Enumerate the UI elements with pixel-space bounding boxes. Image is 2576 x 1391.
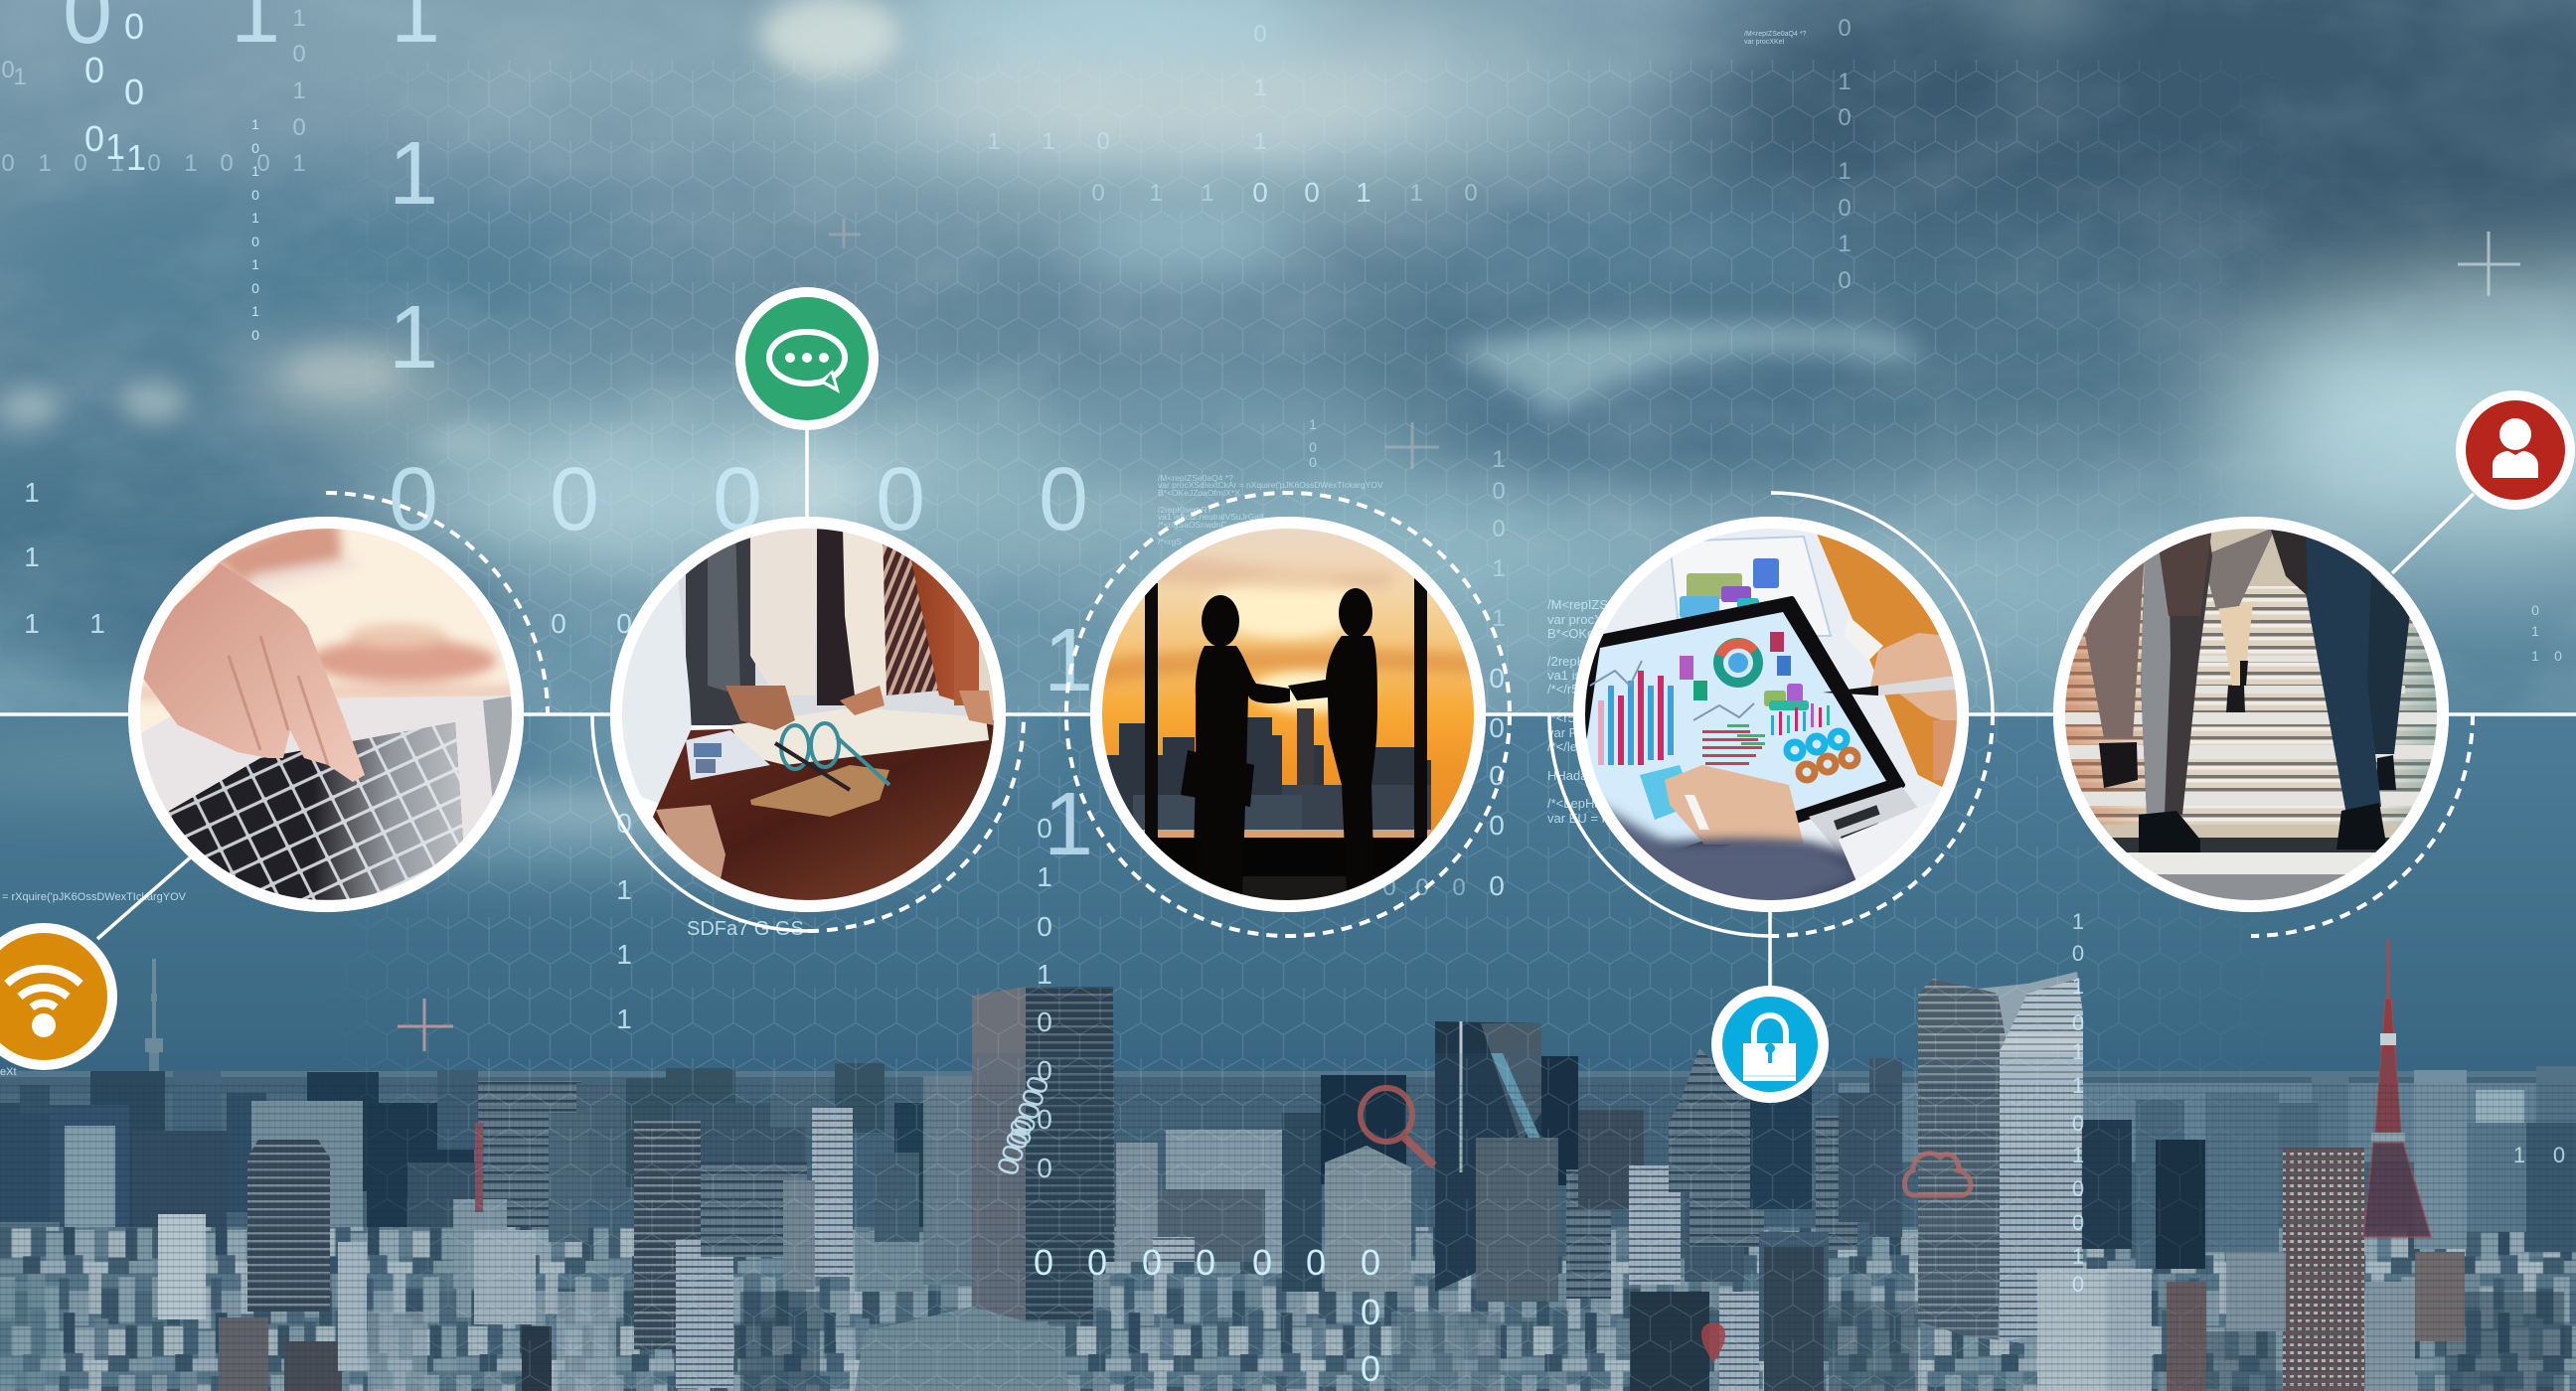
binary digits: medium: 0 xyxy=(124,72,144,112)
far-left leg xyxy=(2085,551,2145,788)
orbit arcs xyxy=(326,493,2473,936)
label: SDFa7 G GS: SDFa7 G GS xyxy=(687,918,804,940)
binary digits: medium: 0 xyxy=(1361,1242,1380,1283)
binary digits: faint columns and rows: 1 xyxy=(1201,180,1214,207)
binary digits: row and columns: 1 xyxy=(24,477,40,508)
binary digits: faint columns and rows: 0 xyxy=(1,150,15,177)
icon: padlock on blue circle xyxy=(1711,986,1829,1103)
binary digits: small: 1 xyxy=(251,116,259,132)
suit and shirts xyxy=(686,527,755,725)
glasses xyxy=(781,723,889,785)
binary digits: large: 1 xyxy=(389,288,438,387)
code snippet: behind middle-right photo xyxy=(1547,597,1624,826)
city cool tint xyxy=(0,1053,2576,1391)
sky clouds below horizon xyxy=(0,696,1034,860)
code snippet: behind middle-right photo: /*<LepHa xyxy=(1547,796,1602,811)
line chart xyxy=(1590,661,1754,720)
solid arc around photo 4, top right xyxy=(1771,493,1993,714)
binary digits: small xyxy=(251,116,2562,664)
low-rise tonal blocks xyxy=(0,1282,2564,1391)
photo 5: business people climbing stairs xyxy=(2053,517,2449,912)
binary digits: tower column: 0 xyxy=(2072,1010,2084,1035)
solid arc around photo 2 xyxy=(592,714,808,931)
code snippet: behind middle-right photo: HHadaX xyxy=(1547,768,1596,783)
binary digits: row and columns: 1 xyxy=(616,1004,632,1034)
binary digits: row and columns: 1 xyxy=(89,608,105,639)
centre-left towers xyxy=(158,1108,924,1388)
lower hand xyxy=(1665,765,1804,845)
donuts row xyxy=(1787,731,1857,780)
binary digits: faint columns and rows: 1 xyxy=(110,150,124,177)
binary digits: faint columns and rows: 0 xyxy=(1838,267,1852,294)
binary digits: row and columns: 0 xyxy=(1037,1104,1052,1135)
binary digits: faint columns and rows: 0 xyxy=(1415,874,1429,901)
binary digits: small: 1 xyxy=(251,163,259,179)
binary digits: faint columns and rows xyxy=(1,5,1852,901)
binary digits: row and columns: 0 xyxy=(1252,177,1268,208)
binary digits: faint columns and rows: 1 xyxy=(13,64,27,90)
binary digits: row and columns: 1 xyxy=(1037,861,1052,892)
arc around photo 1 xyxy=(326,493,548,714)
binary digits: faint columns and rows: 1 xyxy=(1492,555,1506,582)
binary digits: faint columns and rows: 0 xyxy=(292,114,306,141)
icon: chat bubble on green circle xyxy=(735,287,879,430)
binary digits: faint columns and rows: 0 xyxy=(1838,195,1852,222)
binary digits: small: 0 xyxy=(1309,439,1317,455)
binary digits: tower column: 0 xyxy=(2553,1143,2565,1167)
binary digits: faint columns and rows: 0 xyxy=(1838,15,1852,42)
centre-right towers xyxy=(1093,1021,1902,1391)
binary digits: faint columns and rows: 0 xyxy=(1452,874,1466,901)
code snippet: above centre photo: /2repKlsert RT xyxy=(1158,505,1212,515)
dashed arc around photo 5 xyxy=(2251,714,2473,936)
binary digits: medium: 0 xyxy=(84,50,104,90)
binary digits: faint columns and rows: 1 xyxy=(1149,180,1163,207)
binary digits: small: 1 xyxy=(251,303,259,319)
right hand and pen xyxy=(1868,633,1963,725)
code snippet: behind middle-right photo: /*</le xyxy=(1547,739,1577,754)
binary digits: medium: 0 xyxy=(1252,1242,1272,1283)
binary digits: faint columns and rows: 0 xyxy=(1091,180,1105,207)
binary digits: medium: 0 xyxy=(1361,1292,1380,1332)
binary digits: faint columns and rows: 1 xyxy=(987,128,1001,155)
binary digits: row and columns: 1 xyxy=(616,874,632,905)
Tokyo Tower xyxy=(2363,939,2431,1237)
slanted binary digits on tower: 00000 xyxy=(1003,1073,1056,1150)
binary digits: small: 1 xyxy=(2531,623,2539,639)
binary digits: faint columns and rows: 0 xyxy=(220,150,234,177)
binary digits: row and columns: 0 xyxy=(1037,911,1052,942)
icon: map pin xyxy=(1701,1322,1725,1363)
icon: user on red circle xyxy=(2456,390,2575,510)
binary digits: large: 0 xyxy=(876,450,925,549)
connector lines to icons xyxy=(97,427,2474,989)
code snippet: behind middle-right photo: B*<OKeJ xyxy=(1547,626,1601,641)
tower: Skytree xyxy=(145,959,163,1092)
binary digits: faint columns and rows: 1 xyxy=(1492,605,1506,632)
binary digits: small: 0 xyxy=(2531,602,2539,618)
binary digits: large: 1 xyxy=(1044,611,1093,710)
city skyline xyxy=(0,939,2576,1391)
code snippet: left edge: = rXquire('pJK6OssDWexTIckargYOV xyxy=(2,891,187,903)
code snippet: top right xyxy=(1744,31,1807,46)
binary digits: small: 1 xyxy=(251,210,259,226)
small charts xyxy=(1680,656,1693,680)
background chart sheet xyxy=(1670,537,1831,636)
photo 3: handshake silhouettes at sunset xyxy=(1090,517,1491,912)
code snippet: behind middle-right photo: /*</r5 xyxy=(1547,682,1578,696)
binary digits: small: 1 xyxy=(2531,648,2539,664)
binary digits: small: 0 xyxy=(251,280,259,296)
timeline: horizontal line xyxy=(0,712,2576,716)
binary digits: tower column: 1 xyxy=(2072,974,2084,999)
binary digits: medium xyxy=(84,6,1380,1389)
binary digits: medium: 1 xyxy=(105,126,125,167)
binary digits: row and columns: 1 xyxy=(24,608,40,639)
binary digits: medium: 0 xyxy=(84,118,104,159)
blurred background xyxy=(129,522,527,699)
far skyline haze xyxy=(0,1071,2576,1391)
mini bar chart xyxy=(1771,703,1830,735)
code snippet: above centre photo: B*<OKeJZoaOfmIX*X xyxy=(1158,488,1240,498)
keyboard xyxy=(159,722,467,901)
notebook xyxy=(750,765,889,817)
photo 4: analytics dashboard on a tablet xyxy=(1570,517,1973,939)
binary digits: tower column: 0 xyxy=(2072,1210,2084,1235)
code snippet: behind middle-right photo: var EU = Fed xyxy=(1547,811,1624,826)
binary digits: row and columns: 1 xyxy=(1356,177,1371,208)
binary digits: large: 1 xyxy=(389,124,438,224)
binary digits: medium: 0 xyxy=(1087,1242,1107,1283)
tablet frame xyxy=(1575,599,1902,874)
binary digits: tower column: 1 xyxy=(2072,909,2084,934)
binary digits: faint columns and rows: 1 xyxy=(38,150,52,177)
left district buildings xyxy=(0,1063,934,1302)
binary digits: large: 0 xyxy=(550,450,599,549)
binary digits: small: 0 xyxy=(251,187,259,203)
laptop body xyxy=(141,696,511,840)
binary digits: row and columns: 1 xyxy=(616,939,632,970)
background: cloudy sky xyxy=(0,0,2576,918)
code snippet: wifi label: eXt xyxy=(0,1066,17,1078)
keyboard dock xyxy=(1809,787,1938,864)
binary digits: faint columns and rows: 0 xyxy=(1464,180,1478,207)
binary digits: tower column: 0 xyxy=(2072,941,2084,966)
binary digits: faint columns and rows: 0 xyxy=(292,41,306,68)
binary digits: large: 0 xyxy=(713,450,762,549)
code snippet: behind middle-right photo: var procX xyxy=(1547,612,1603,627)
binary digits: row and columns: 0 xyxy=(1037,813,1052,844)
code snippet: above centre photo: va1 isBct2.neutralVSuJrGa8 xyxy=(1158,512,1264,522)
binary digits: large: 0 xyxy=(389,450,438,549)
binary digits: row and columns: 0 xyxy=(616,608,632,639)
binary digits: faint columns and rows: 0 xyxy=(74,150,87,177)
binary digits: tower column: 0 xyxy=(2072,1272,2084,1297)
binary digits: row and columns: 0 xyxy=(1037,1006,1052,1037)
binary digits: small: 0 xyxy=(251,233,259,249)
far-right leg xyxy=(2365,571,2410,790)
binary digits: faint columns and rows: 0 xyxy=(1096,128,1110,155)
dashed arc around photo 2 xyxy=(808,714,1024,931)
dashed circle around photo 3 xyxy=(1066,493,1510,936)
icon: magnifying glass xyxy=(1361,1088,1434,1165)
left white sleeve xyxy=(616,556,696,810)
crosshair marks xyxy=(398,219,2520,1051)
binary digits: row and columns: 0 xyxy=(1489,810,1505,841)
icon: wifi on orange circle xyxy=(0,923,117,1070)
code snippet: behind middle-right photo: /M<repIZSe xyxy=(1547,597,1615,612)
table xyxy=(616,720,1004,904)
bar chart xyxy=(1598,671,1674,765)
right district buildings xyxy=(2136,1066,2576,1391)
binary digits: row and columns xyxy=(24,177,1505,1183)
binary digits: medium: 1 xyxy=(126,137,146,178)
donut chart xyxy=(1718,643,1758,683)
code snippet: behind middle-right photo: var Ru xyxy=(1547,725,1585,740)
code snippet: above centre photo: /M<repIZSe0aQ4 *? xyxy=(1158,473,1233,483)
binary digits: row and columns: 0 xyxy=(1489,870,1505,901)
left man xyxy=(1181,595,1290,894)
binary digits: row and columns: 0 xyxy=(1489,760,1505,791)
binary digits: row and columns: 1 xyxy=(1037,959,1052,990)
code snippet: above centre photo xyxy=(1158,473,1383,546)
code snippet: above centre photo: var procXSdIextCkAr = nXquire('pJK6OssDWexTIckargYOV xyxy=(1158,480,1383,490)
binary digits: large xyxy=(63,0,1093,874)
dashed arc around photo 4 xyxy=(1771,714,1993,936)
binary digits: tower column: 0 xyxy=(2072,1176,2084,1201)
binary digits: faint columns and rows: 0 xyxy=(256,150,270,177)
binary digits: faint columns and rows: 0 xyxy=(147,150,161,177)
hand and fingers xyxy=(129,563,365,782)
binary digits: faint columns and rows: 0 xyxy=(1382,874,1396,901)
tablet screen xyxy=(1580,612,1886,864)
slanted binary digits on tower: 0000 xyxy=(991,1116,1040,1179)
binary digits: small: 0 xyxy=(1309,454,1317,470)
hands xyxy=(725,686,795,730)
code snippet: above centre photo: /*<rgS xyxy=(1158,537,1182,546)
main left leg xyxy=(2139,527,2212,852)
code snippet: top right: var procXKeI xyxy=(1744,39,1785,46)
binary digits: faint columns and rows: 1 xyxy=(1838,231,1852,257)
binary digits: faint columns and rows: 1 xyxy=(1409,180,1423,207)
binary digits: faint columns and rows: 1 xyxy=(292,150,306,177)
city window texture xyxy=(0,1083,2576,1391)
stacked stripes xyxy=(1702,730,1762,765)
binary digits: faint columns and rows: 1 xyxy=(1838,69,1852,95)
code snippet: behind middle-right photo: /2repK xyxy=(1547,654,1586,669)
binary digits: row and columns: 0 xyxy=(616,808,632,839)
binary digits: tower column: 1 xyxy=(2072,1244,2084,1269)
binary digits: faint columns and rows: 0 xyxy=(1253,21,1267,48)
code snippet: top right: /M<repIZSe0aQ4 *? xyxy=(1744,31,1807,38)
binary digits: faint columns and rows: 1 xyxy=(1492,446,1506,473)
binary digits: tower column: 1 xyxy=(2072,1143,2084,1167)
code snippet: behind middle-right photo: /*<r5 xyxy=(1547,710,1575,725)
binary digits: faint columns and rows: 0 xyxy=(1838,104,1852,131)
binary digits: medium: 0 xyxy=(1142,1242,1162,1283)
window frame xyxy=(1145,583,1158,842)
binary digits: row and columns: 0 xyxy=(1304,177,1320,208)
low-rise city carpet xyxy=(0,1227,2576,1391)
binary digits: tower column: 1 xyxy=(2513,1143,2525,1167)
solid arc around photo 4, bottom left xyxy=(1549,714,1771,936)
binary digits: faint columns and rows: 1 xyxy=(1042,128,1055,155)
binary digits: faint columns and rows: 1 xyxy=(1253,128,1267,155)
binary digits: faint columns and rows: 1 xyxy=(184,150,198,177)
binary digits: medium: 0 xyxy=(1034,1242,1053,1283)
binary digits: row and columns: 0 xyxy=(1037,1153,1052,1183)
binary digits: small: 1 xyxy=(251,256,259,272)
binary digits: faint columns and rows: 1 xyxy=(1253,75,1267,101)
stair treads xyxy=(2057,656,2447,806)
photo 2: business meeting at a wooden table xyxy=(610,517,1009,912)
woman xyxy=(2201,527,2276,712)
binary digits: medium: 0 xyxy=(124,6,144,47)
right man xyxy=(1288,588,1377,894)
binary digits: medium: 0 xyxy=(1196,1242,1215,1283)
binary digits: faint columns and rows: 0 xyxy=(1492,478,1506,505)
binary digits: medium: 0 xyxy=(1306,1242,1326,1283)
skyline silhouette xyxy=(1093,708,1431,847)
sky clouds above horizon xyxy=(0,0,2576,745)
icon: cloud xyxy=(1904,1154,1971,1195)
binary digits: faint columns and rows: 1 xyxy=(292,5,306,32)
code snippet: behind middle-right photo: va1 isE xyxy=(1547,668,1590,683)
central double tower xyxy=(923,987,1115,1321)
binary digits: tower column: 1 xyxy=(2072,1073,2084,1098)
binary digits: row and columns: 0 xyxy=(551,608,566,639)
binary digits: faint columns and rows: 0 xyxy=(1,57,15,83)
binary digits: small: 0 xyxy=(251,327,259,343)
papers xyxy=(730,707,989,765)
binary digits: medium: 0 xyxy=(1361,1348,1380,1389)
binary digits: large: 1 xyxy=(1044,775,1093,874)
binary digits: row and columns: 0 xyxy=(1489,712,1505,743)
binary digits: row and columns: 0 xyxy=(1037,1055,1052,1086)
binary digits: small: 0 xyxy=(251,140,259,156)
binary digits: row and columns: 0 xyxy=(1489,663,1505,694)
binary digits: large: 0 xyxy=(1039,450,1088,549)
binary digits: tower column xyxy=(2072,909,2565,1297)
table widget xyxy=(1640,765,1694,820)
Roppongi-style skyscraper xyxy=(1918,972,2152,1391)
binary digits: row and columns: 1 xyxy=(24,541,40,572)
binary digits: faint columns and rows: 1 xyxy=(1838,158,1852,185)
code snippet: above centre photo: /*<r/gSaOSnwdnC xyxy=(1158,520,1227,530)
binary digits: faint columns and rows: 1 xyxy=(292,77,306,104)
binary digits: faint columns and rows: 0 xyxy=(1492,516,1506,542)
slanted binary digits on tower xyxy=(991,1073,1056,1179)
binary digits: small: 0 xyxy=(2554,648,2562,664)
honeycomb grid xyxy=(370,60,2205,1391)
photo 1: hands typing on a laptop xyxy=(128,517,527,914)
binary digits: small: 1 xyxy=(1309,416,1317,432)
binary digits: tower column: 1 xyxy=(2072,1039,2084,1064)
main right leg xyxy=(2270,527,2387,850)
foreground blur xyxy=(1570,840,1908,939)
binary digits: tower column: 0 xyxy=(2072,1111,2084,1136)
